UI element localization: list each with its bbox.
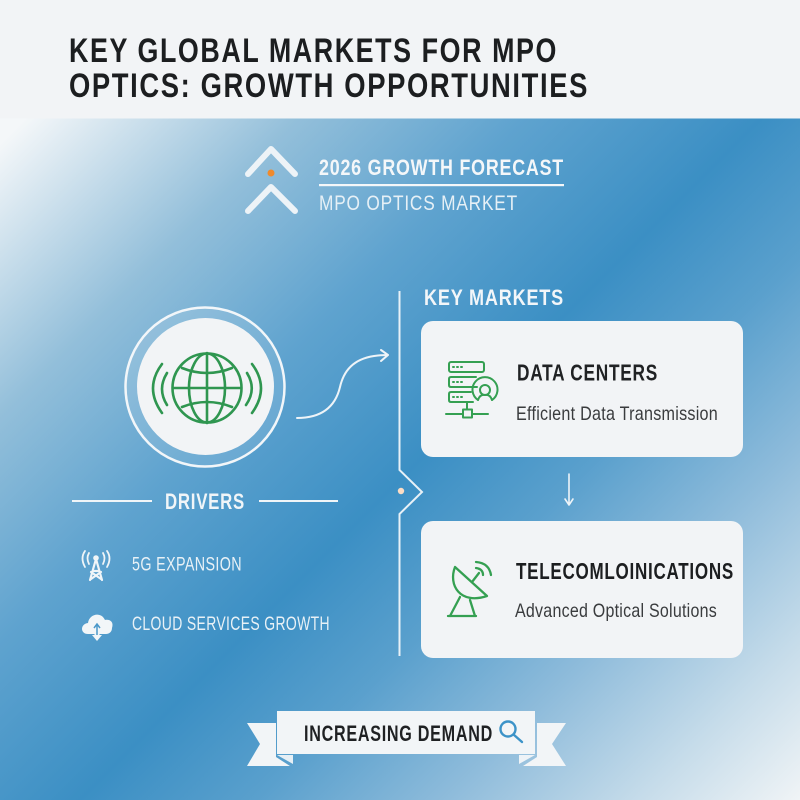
arrow: down between cards bbox=[565, 474, 573, 505]
panel: data centers bbox=[421, 321, 743, 457]
icon: double chevron up bbox=[248, 149, 295, 211]
icon: antenna tower bbox=[82, 551, 110, 580]
driver: cloud services growth bbox=[82, 613, 330, 641]
icon: globe badge bbox=[126, 308, 284, 466]
panel: telecommunications bbox=[421, 521, 743, 658]
banner: increasing demand: INCREASING DEMAND bbox=[304, 721, 493, 746]
driver: 5G expansion bbox=[82, 551, 242, 580]
data centers title: DATA CENTERS bbox=[517, 360, 658, 386]
title bbox=[69, 32, 589, 105]
vertical divider with notch bbox=[398, 291, 422, 656]
title: KEY GLOBAL MARKETS FOR MPO bbox=[69, 32, 558, 70]
drivers heading: DRIVERS bbox=[165, 489, 245, 514]
title: OPTICS: GROWTH OPPORTUNITIES bbox=[69, 67, 589, 105]
icon: cloud download bbox=[82, 615, 113, 641]
icon: satellite dish bbox=[448, 562, 491, 616]
forecast title: 2026 GROWTH FORECAST bbox=[319, 155, 564, 180]
arrow: curved to key markets bbox=[297, 350, 388, 418]
forecast subtitle: MPO OPTICS MARKET bbox=[319, 191, 518, 215]
key markets heading: KEY MARKETS bbox=[424, 285, 564, 310]
data centers description: Efficient Data Transmission bbox=[516, 403, 718, 425]
telecommunications description: Advanced Optical Solutions bbox=[515, 600, 717, 622]
title band bbox=[0, 0, 800, 118]
driver: 5G expansion: 5G EXPANSION bbox=[132, 554, 242, 576]
forecast header bbox=[248, 149, 564, 215]
banner: increasing demand bbox=[247, 711, 566, 766]
driver: cloud services growth: CLOUD SERVICES GROWTH bbox=[132, 613, 330, 635]
icon: magnifier bbox=[500, 722, 522, 742]
icon: server network bbox=[446, 362, 498, 418]
